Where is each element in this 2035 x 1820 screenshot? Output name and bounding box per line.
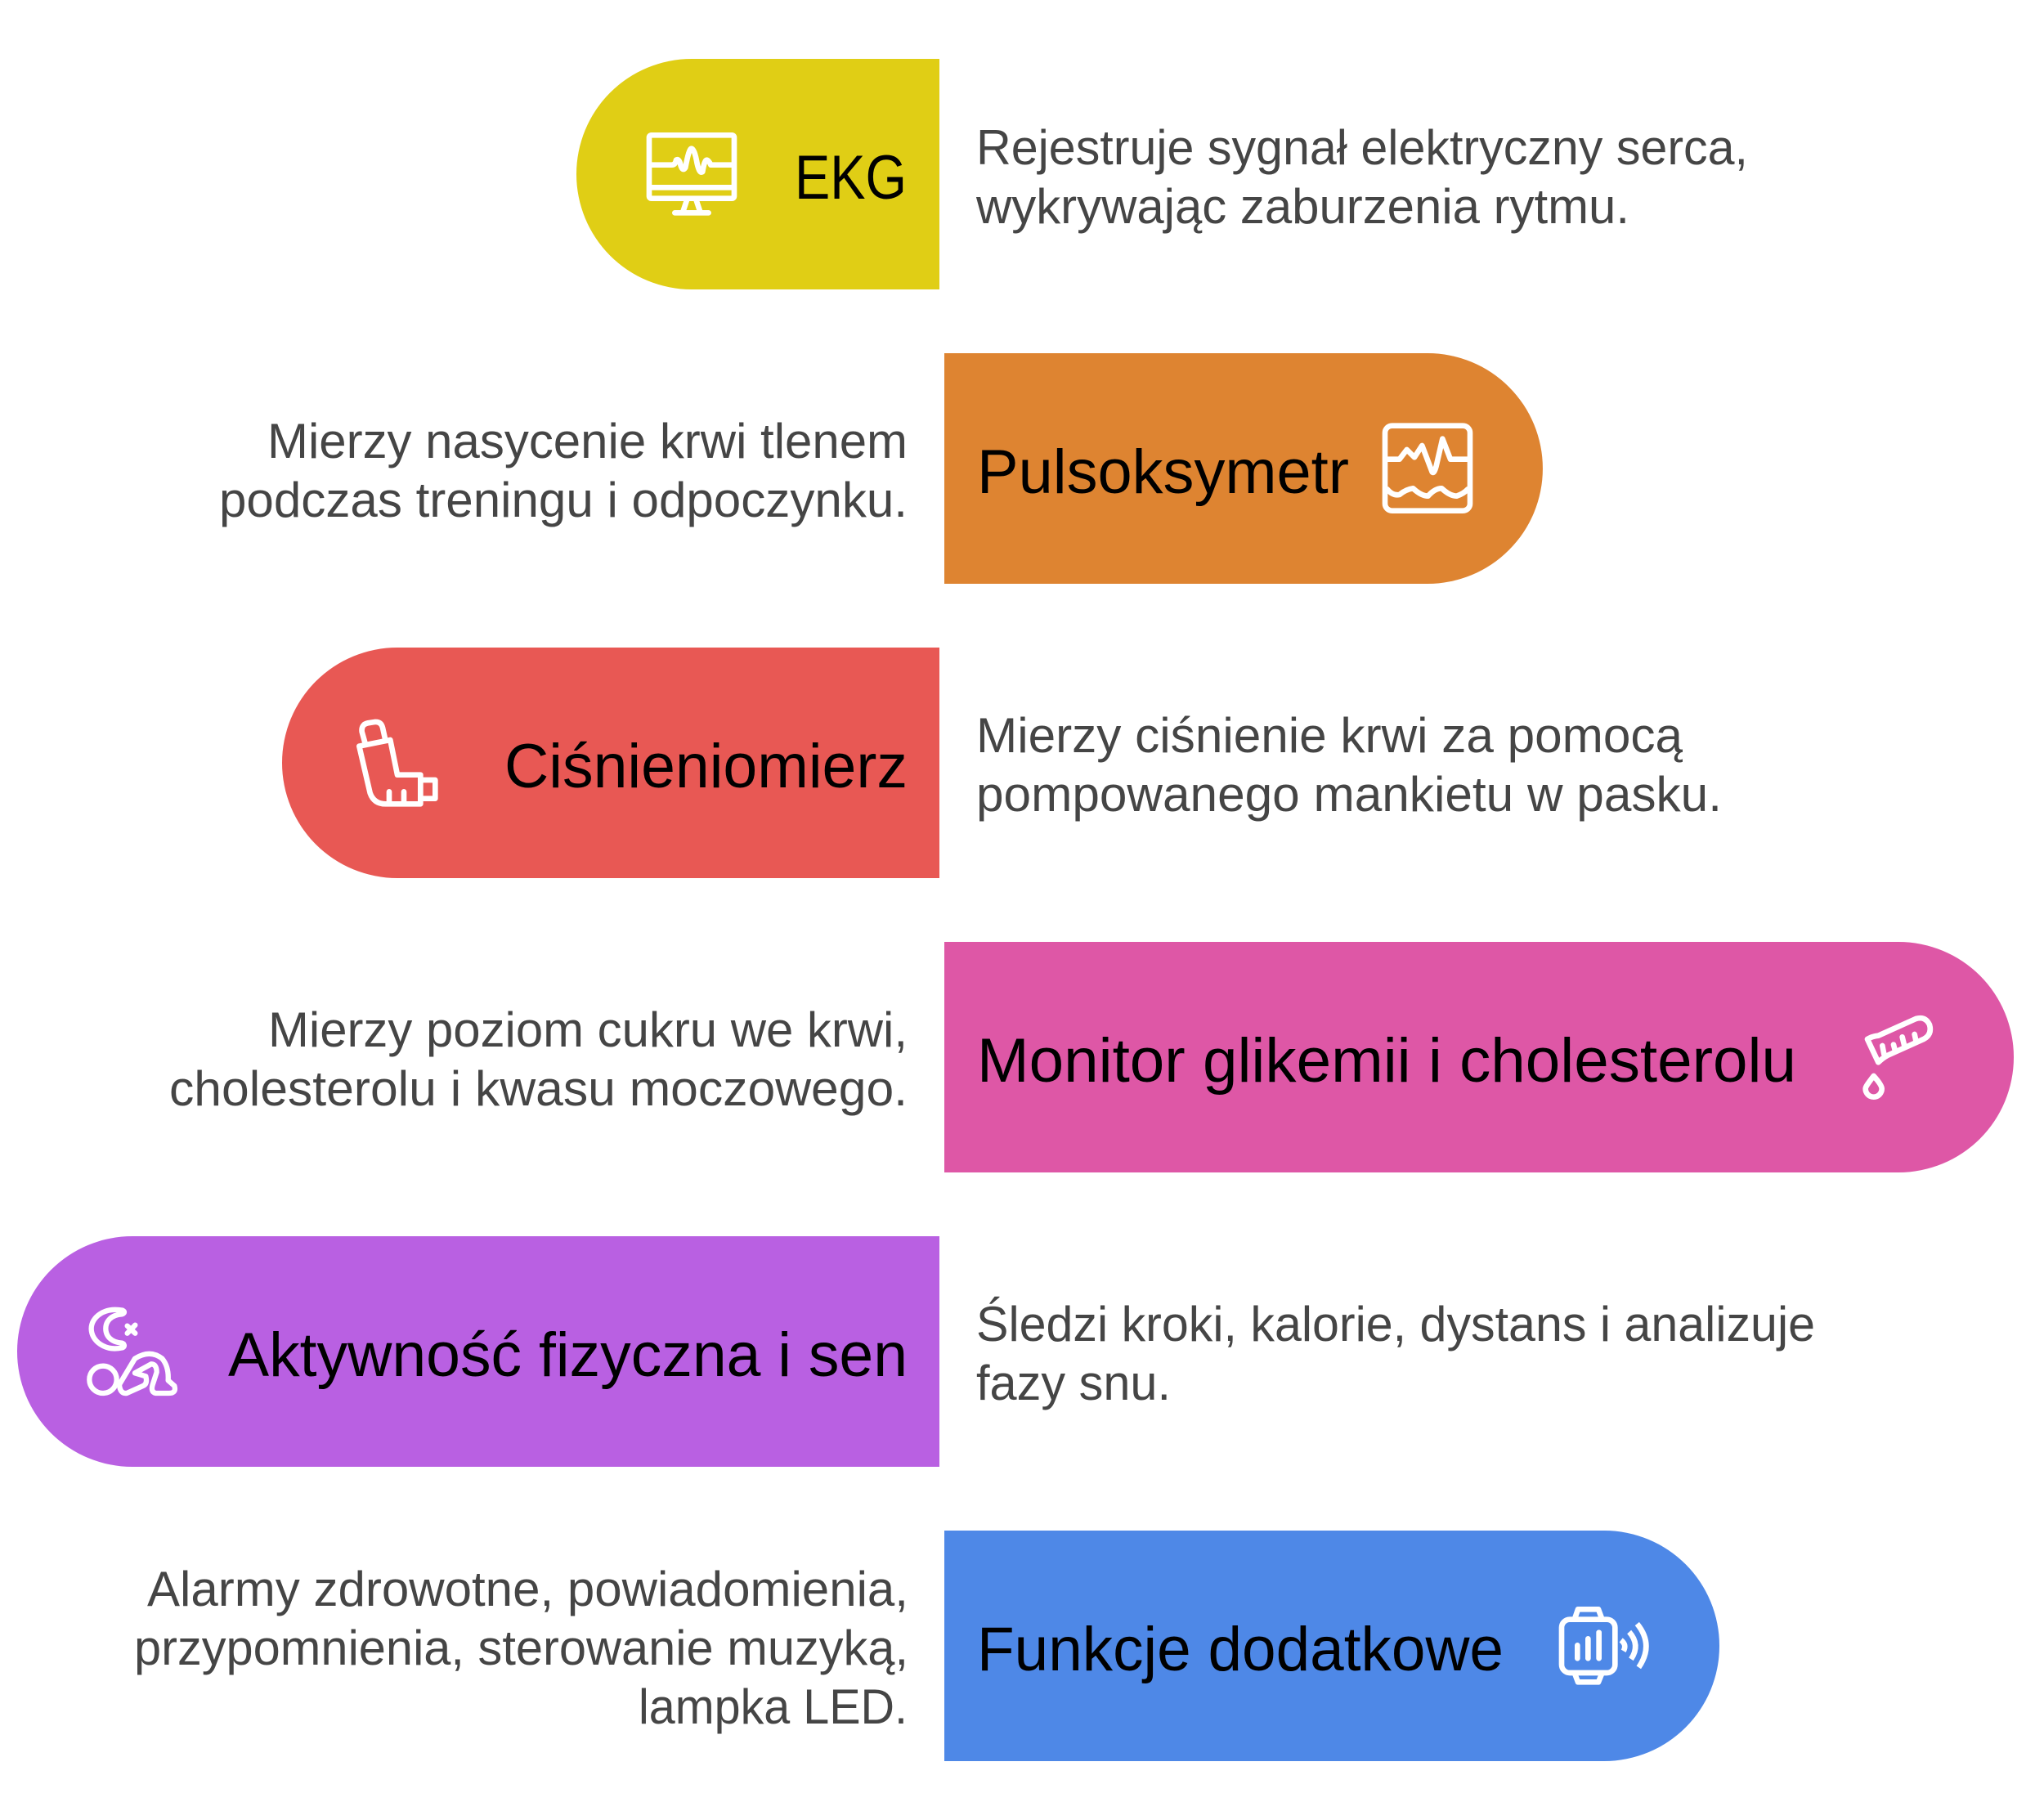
description: Monitor glikemii i cholesterolu: cholesterolu i kwasu moczowego. [169, 1061, 908, 1116]
title: Aktywność fizyczna i sen: Aktywność fizyczna i sen [228, 1320, 908, 1390]
description: Monitor glikemii i cholesterolu: Mierzy poziom cukru we krwi, [268, 1002, 908, 1057]
description: Funkcje dodatkowe: Alarmy zdrowotne, powiadomienia, [147, 1562, 908, 1616]
icon: inhaler-shaped device [359, 722, 435, 804]
description: EKG: Rejestruje sygnał elektryczny serca, [976, 120, 1748, 175]
description: Funkcje dodatkowe: przypomnienia, sterowanie muzyką, [134, 1621, 908, 1675]
description: Pulsoksymetr: Mierzy nasycenie krwi tlenem [267, 414, 908, 468]
title: EKG: EKG [795, 143, 907, 213]
description: EKG: wykrywając zaburzenia rytmu. [975, 179, 1629, 234]
title: Pulsoksymetr: Pulsoksymetr [977, 437, 1349, 507]
description: Ciśnieniomierz: pompowanego mankietu w pasku. [976, 767, 1722, 822]
icon: ECG monitor [649, 135, 734, 213]
panel: Aktywność fizyczna i sen [17, 1236, 939, 1467]
description: Ciśnieniomierz: Mierzy ciśnienie krwi za pomocą [976, 708, 1683, 763]
icon: test tube with drop [1866, 1018, 1930, 1097]
pill: Monitor glikemii i cholesterolu [944, 942, 2014, 1172]
description: Funkcje dodatkowe: lampka LED. [639, 1679, 908, 1734]
panel: Pulsoksymetr [944, 353, 1543, 584]
description: Aktywność fizyczna i sen: fazy snu. [976, 1356, 1171, 1410]
title: Ciśnieniomierz: Ciśnieniomierz [504, 732, 908, 801]
pill: Pulsoksymetr [944, 353, 1543, 584]
icon: smartwatch with signal [1562, 1609, 1646, 1682]
panel: Monitor glikemii i cholesterolu [944, 942, 2014, 1172]
panel: Funkcje dodatkowe [944, 1531, 1719, 1761]
panel: Ciśnieniomierz [282, 648, 939, 878]
description: Aktywność fizyczna i sen: Śledzi kroki, kalorie, dystans i analizuje [976, 1297, 1815, 1352]
icon: pulse waveform [1385, 426, 1470, 511]
description: Pulsoksymetr: podczas treningu i odpoczynku. [219, 473, 908, 527]
pill: EKG [576, 59, 939, 289]
pill: Ciśnieniomierz [282, 648, 939, 878]
title: Funkcje dodatkowe: Funkcje dodatkowe [977, 1615, 1504, 1684]
icon: moon and sleeper [89, 1310, 175, 1393]
panel: EKG [576, 59, 939, 289]
pill: Funkcje dodatkowe [944, 1531, 1719, 1761]
title: Monitor glikemii i cholesterolu: Monitor glikemii i cholesterolu [977, 1026, 1796, 1096]
pill: Aktywność fizyczna i sen [17, 1236, 939, 1467]
